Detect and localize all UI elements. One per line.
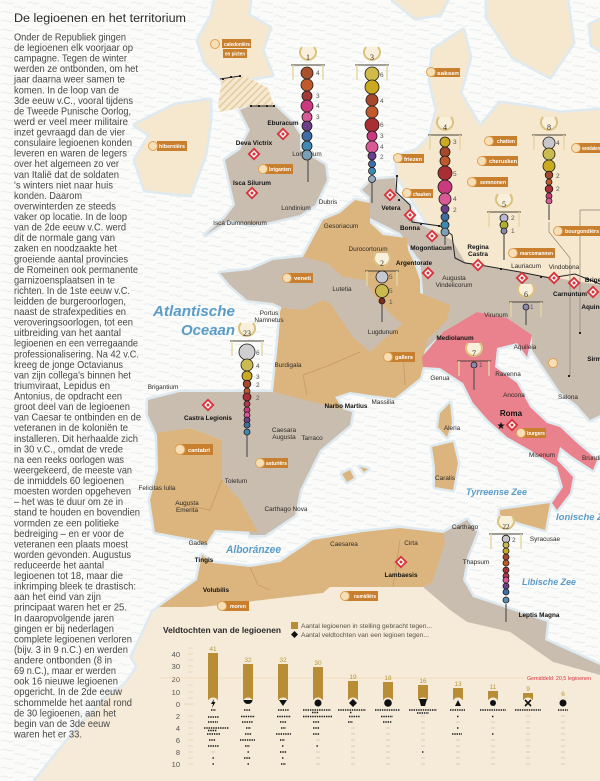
- average line: Gemiddeld: 20,5 legioenen: [527, 676, 591, 682]
- bar values: 32: [244, 657, 252, 664]
- stack counts: 4: [316, 70, 320, 77]
- chart: campaigns of the legions: [160, 622, 591, 769]
- legion stack 2: [365, 253, 399, 322]
- legion stack 8: [532, 117, 566, 220]
- body text: veteranen een plaats moest: [14, 539, 128, 550]
- body text: werd er veel meer militaire: [13, 117, 128, 128]
- place names: Misenum: [529, 452, 555, 459]
- place names: Isca Dumnonlorum: [213, 220, 267, 227]
- bar values: 41: [209, 646, 217, 653]
- body text: vaker op locatie. In de loop: [14, 212, 127, 223]
- body text: [13, 32, 141, 740]
- body text: waren het er 33.: [13, 730, 82, 740]
- chart axis: 30: [172, 662, 180, 671]
- place names: Salona: [558, 394, 578, 401]
- stack counts: 4: [380, 144, 384, 151]
- place names: Leptis Magna: [519, 612, 560, 619]
- stack counts: 2: [511, 215, 515, 222]
- place names: Vindelicorum: [436, 282, 472, 289]
- chart legend: Aantal legioenen in stelling gebracht tegen...: [301, 623, 432, 630]
- stack counts: 6: [380, 122, 384, 129]
- place names: Tingis: [195, 557, 214, 564]
- place names: Portus: [260, 310, 278, 317]
- place names: Londinium: [292, 151, 322, 158]
- place names: Carnuntum: [553, 291, 587, 298]
- bar values: 11: [490, 684, 497, 691]
- place names: Vetera: [381, 205, 401, 212]
- place names: Caesara: [272, 427, 297, 434]
- chart title: Veldtochten van de legioenen: [163, 625, 281, 635]
- body text: In daaropvolgende jaren: [14, 613, 114, 624]
- chart axis: 6: [176, 736, 180, 745]
- place names: Felicitas Iulia: [139, 485, 176, 492]
- stack counts: [256, 70, 560, 544]
- stack counts: 6: [256, 350, 260, 357]
- chart axis: 20: [172, 675, 180, 684]
- enemy people tags: hiberniërs: [159, 144, 185, 150]
- stack counts: 4: [316, 103, 320, 110]
- chart axis: 0: [176, 700, 180, 709]
- body text: de Romeinen ook permanente: [14, 265, 138, 276]
- body text: leveren en waren de legers: [14, 149, 127, 160]
- zero markers: [211, 716, 565, 764]
- legion stack 6: [509, 284, 543, 325]
- place names: Emerita: [176, 507, 198, 514]
- place names: Augusta: [272, 434, 296, 441]
- stack counts: 2: [556, 186, 560, 193]
- place names: Aleria: [444, 425, 461, 432]
- bar values: 19: [349, 674, 357, 681]
- legion stack 7: [457, 343, 491, 390]
- place names: Carthago: [452, 524, 479, 531]
- stack counts: 5: [389, 274, 393, 281]
- legion stack 22: 22: [502, 523, 510, 531]
- place names: Carthago Nova: [265, 506, 308, 513]
- body text: Onder de Republiek gingen: [14, 32, 126, 44]
- thin provincial command lines: [549, 210, 600, 376]
- place names: Deva Victrix: [236, 140, 273, 147]
- legion stack 23: [230, 323, 264, 457]
- place names: Lutetia: [332, 286, 352, 293]
- place names: Ancona: [503, 392, 525, 399]
- legion camps: red diamonds: [201, 127, 600, 569]
- enemy people tags: cherusken: [489, 159, 517, 165]
- enemy people tags: asturiërs: [266, 461, 287, 467]
- stack counts: 2: [256, 382, 260, 389]
- place names: Burdigala: [274, 362, 302, 369]
- place names: Namnetus: [254, 317, 284, 324]
- place names: Thapsum: [463, 559, 489, 566]
- place names: Mediolanum: [436, 335, 474, 342]
- body text: – het was te duur om ze in: [14, 497, 123, 508]
- body text: garnizoensplaatsen in te: [14, 275, 115, 286]
- place names: Massilia: [371, 399, 395, 406]
- stack counts: 3: [256, 374, 260, 381]
- enemy people tags: en picten: [225, 52, 245, 58]
- enemy people tags: saksen: [437, 71, 460, 77]
- place names: Lauriacum: [511, 263, 541, 270]
- body text: groeiende aantal provincies: [14, 254, 128, 265]
- place names: Narbo Martius: [325, 403, 368, 410]
- bar values: 18: [384, 675, 392, 682]
- body text: gingen er bij nederlagen: [14, 624, 114, 635]
- stack counts: 6: [380, 72, 384, 79]
- stack counts: 2: [256, 395, 260, 402]
- body text: legioenen en een verregaande: [14, 339, 138, 350]
- place names: Volubilis: [203, 587, 230, 594]
- body text: consulaire legioenen konden: [14, 138, 132, 149]
- body text: richten. In de 1ste eeuw v.C.: [14, 286, 130, 297]
- body text: schommelde het aantal rond: [14, 698, 132, 709]
- chart axis: 2: [176, 712, 180, 721]
- sea names: Alboránzee: [225, 544, 281, 556]
- sea names: Tyrreense Zee: [466, 487, 528, 498]
- stack counts: 4: [453, 196, 457, 203]
- body text: weergekeerd, de meeste van: [13, 466, 132, 476]
- stack counts: 4: [556, 140, 560, 147]
- place names: Regina: [467, 244, 489, 251]
- place names: [139, 120, 600, 619]
- body text: de 30 legioenen, aan het: [14, 708, 116, 719]
- body text: de inmiddels 60 legioenen: [14, 476, 124, 487]
- body text: bedreiging – en er voor de: [14, 529, 124, 540]
- sea names: Libische Zee: [522, 577, 577, 588]
- sea names: Oceaan: [181, 322, 235, 339]
- legion stack 4: 4: [443, 123, 447, 132]
- body text: complete legioenen verloren: [14, 634, 132, 645]
- place names: Roma: [500, 409, 523, 418]
- chart axis: 40: [172, 650, 180, 659]
- stack counts: 5: [453, 171, 457, 178]
- enemy people tags: cantabri: [188, 448, 210, 454]
- bar values: 6: [561, 691, 565, 698]
- legion stack 23: 23: [243, 329, 251, 338]
- body text: in 30 v.C., omdat de vrede: [14, 444, 123, 455]
- place names: Ravenna: [495, 371, 521, 378]
- place names: Augusta: [442, 275, 466, 282]
- body text: inkrimping bleek te drastisch:: [14, 582, 136, 593]
- body text: werden ze ontbonden, om het: [13, 64, 138, 75]
- place names: Durocortorum: [348, 246, 388, 253]
- legion stack 3: 3: [370, 53, 374, 62]
- place names: Tarraco: [301, 435, 323, 442]
- body text: veteranen in de koloniën te: [14, 423, 128, 434]
- place names: Lambaesis: [384, 572, 418, 579]
- frontier lines: [220, 76, 600, 284]
- body text: opgericht. In de 2de eeuw: [14, 687, 123, 698]
- body text: uitbreiding van het aantal: [14, 328, 121, 339]
- place names: Vindobona: [549, 264, 580, 271]
- bar values: 9: [526, 686, 530, 693]
- place names: Mogontiacum: [410, 245, 452, 252]
- body text: ook 16 nieuwe legioenen: [14, 677, 118, 688]
- body text: professionalisering. Na 42 v.C.: [14, 349, 139, 360]
- enemy people tags: chatten: [497, 139, 515, 145]
- body text: konden. Daarom: [14, 191, 82, 202]
- stack counts: 4: [256, 363, 260, 370]
- body text: over het algemeen zo ver: [14, 159, 120, 170]
- sea names: Atlantische: [152, 303, 235, 320]
- legion stack 6: 6: [524, 290, 528, 299]
- enemy people tags: veneti: [294, 276, 311, 282]
- body text: de legioenen elk voorjaar op: [14, 43, 133, 54]
- body text: campagne. Tegen de winter: [14, 54, 128, 65]
- body text: veroveringsoorlogen, tot een: [14, 318, 133, 329]
- bars: [208, 653, 566, 706]
- body text: reduceerde het aantal: [14, 560, 104, 572]
- body text: 's winters niet naar huis: [14, 180, 113, 191]
- place names: Argentorate: [396, 260, 433, 267]
- place names: Dubris: [319, 199, 337, 206]
- legion stack 8: 8: [547, 123, 551, 132]
- campaign dots: [204, 710, 568, 764]
- stack counts: 3: [316, 114, 320, 121]
- place names: Caesarea: [330, 541, 358, 548]
- bar values: 32: [279, 657, 287, 664]
- body text: van Italië dat de soldaten: [14, 170, 119, 181]
- stack counts: 5: [389, 288, 393, 295]
- body text: installeren. Dit herhaalde zich: [14, 434, 138, 445]
- body text: legioenen tot 18, maar die: [14, 571, 123, 582]
- chart axis: 8: [176, 748, 180, 757]
- body text: groot deel van de legioenen: [14, 402, 130, 413]
- bar values: 16: [419, 678, 427, 685]
- chart legend: [291, 622, 432, 639]
- body text: van de 2de eeuw v.C. werd: [14, 223, 126, 234]
- legion stack 5: [487, 194, 521, 260]
- body text: aan het eind van zijn: [14, 592, 101, 603]
- body text: van Caesar te ontbinden en de: [14, 413, 141, 424]
- legion stack 3: [355, 47, 389, 203]
- enemy people tags: moren: [230, 604, 246, 610]
- enemy people tags: gallers: [395, 355, 413, 361]
- body text: triumviraat, Lepidus en: [14, 381, 110, 392]
- legion stack 4: [428, 117, 462, 245]
- enemy people tags: chauken: [413, 192, 431, 198]
- province boundaries: [175, 352, 405, 590]
- body text: na een reeks oorlogen was: [14, 455, 124, 466]
- enemy people tags: [148, 39, 600, 611]
- place names: Caralis: [435, 475, 455, 482]
- body text: Antonius, de opdracht een: [14, 392, 122, 402]
- body text: principaat waren het er 25.: [14, 603, 127, 614]
- body text: naast de strafexpedities en: [14, 307, 126, 318]
- chart axis: 10: [172, 688, 180, 697]
- legion stack 22: [489, 516, 523, 622]
- stack counts: 3: [316, 93, 320, 100]
- body text: jaar daarna weer samen te: [13, 75, 125, 86]
- stack counts: 1: [389, 299, 393, 306]
- hatched border zone in Britain: [218, 76, 274, 112]
- stack counts: 2: [512, 537, 516, 544]
- stack counts: 4: [380, 98, 384, 105]
- chart axis: 10: [172, 760, 180, 769]
- legion stack 2: 2: [380, 259, 384, 268]
- body text: (bijv. 3 in 9 n.C.) en werden: [14, 645, 128, 656]
- enemy people tags: numidiërs: [354, 594, 376, 600]
- place names: Gesoriacum: [324, 223, 358, 230]
- place names: Isca Silurum: [233, 180, 271, 187]
- body text: vormden ze een politieke: [14, 518, 119, 529]
- enemy people tags: semnonen: [480, 180, 506, 186]
- enemy people tags: burgers: [527, 431, 545, 437]
- place names: Eburacum: [267, 120, 299, 127]
- enemy people tags: marcomannen: [520, 251, 553, 257]
- sea names: [152, 303, 600, 588]
- place names: Lugdunum: [368, 329, 398, 336]
- place names: Aquileia: [514, 344, 537, 351]
- stack counts: 2: [453, 207, 457, 214]
- legion stack 7: 7: [472, 349, 476, 358]
- body text: dit de normale gang van: [14, 233, 115, 244]
- place names: Londinium: [281, 205, 311, 212]
- body text: worden gevonden. Augustus: [13, 550, 131, 561]
- stack counts: 1: [511, 228, 515, 235]
- body text: van zijn collega's binnen het: [14, 370, 131, 381]
- stack counts: 1: [479, 362, 483, 369]
- bar values: 13: [454, 681, 462, 688]
- place names: Virunum: [484, 312, 508, 319]
- place names: Cirta: [404, 540, 418, 547]
- enemy people tags: friezen: [404, 157, 422, 163]
- enemy people tags: briganten: [269, 167, 291, 173]
- place names: Castra Legionis: [184, 415, 232, 422]
- enemy people tags: caledoniërs: [224, 42, 250, 48]
- stack counts: 2: [380, 154, 384, 161]
- body text: leidden de burgeroorlogen,: [14, 296, 126, 308]
- stack counts: 2: [556, 173, 560, 180]
- stack counts: 3: [453, 139, 457, 146]
- legion stack 5: 5: [502, 200, 506, 209]
- title: De legioenen en het territorium: [14, 11, 186, 25]
- bar values: 30: [314, 660, 322, 667]
- body text: de Tweede Punische Oorlog,: [14, 106, 131, 117]
- chart axis: 4: [176, 724, 180, 733]
- legion stack 1: [291, 47, 325, 182]
- body text: 69 n.C.), maar er werden: [14, 666, 116, 677]
- place names: Syracusae: [530, 536, 561, 543]
- body text: overwinterden ze steeds: [14, 202, 116, 212]
- place names: Castra: [468, 251, 488, 258]
- icon: Rome star: ★: [497, 421, 506, 432]
- place names: Bonna: [400, 225, 420, 232]
- body text: begin van de 3de eeuw: [14, 719, 111, 730]
- body text: stand te houden en bovendien: [14, 508, 140, 519]
- stack counts: 1: [530, 304, 534, 311]
- body text: zaken en noodzaakte het: [14, 244, 117, 255]
- place names: Genua: [430, 375, 450, 382]
- chart legend: Aantal veldtochten van een legioen tegen...: [301, 632, 429, 639]
- place names: Gades: [189, 540, 207, 547]
- body text: moesten worden opgeheven: [14, 487, 131, 498]
- place names: Augusta: [175, 500, 199, 507]
- chart axis: [172, 648, 194, 769]
- body text: andere ontbonden (8 in: [14, 656, 112, 666]
- place names: Toletum: [225, 478, 247, 485]
- stack counts: 3: [380, 133, 384, 140]
- place names: Brigantium: [148, 384, 178, 391]
- body text: inzet gevraagd dan de vier: [14, 128, 126, 138]
- legion stack 1: 1: [306, 53, 310, 62]
- body text: 3de eeuw v.C., vooral tijdens: [14, 96, 133, 107]
- enemy icons: [208, 698, 568, 708]
- body text: kreeg de jonge Octavianus: [14, 360, 123, 371]
- body text: komen. In de loop van de: [14, 85, 119, 96]
- bar values: [209, 646, 565, 698]
- frontier forts: [222, 75, 581, 377]
